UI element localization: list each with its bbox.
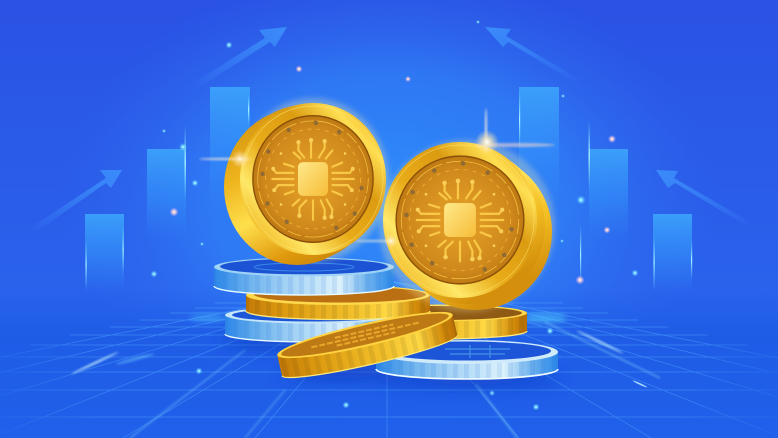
arrow: upper right [485, 27, 578, 84]
coin face: circuit chip [396, 156, 524, 284]
tilted gold coin: front [275, 304, 459, 384]
blue coin: front right [376, 340, 558, 379]
arrow: lower left [30, 170, 122, 232]
flare on left coin [199, 150, 251, 168]
coin face: circuit chip [253, 116, 373, 242]
large gold chip coin: left [224, 98, 389, 265]
large gold chip coin: right [379, 140, 555, 312]
blue coin: lower left of stack [225, 306, 399, 342]
left rising bar chart [85, 87, 250, 294]
right mirrored bar chart [519, 87, 692, 294]
arrow: upper left [192, 27, 287, 88]
perspective floor grid [0, 280, 778, 438]
gold coin: right under large coin [347, 304, 527, 339]
arrow: lower right [656, 170, 750, 228]
coin shadows on floor [220, 336, 560, 386]
gold coin: middle of stack [246, 285, 430, 320]
blue coin: top of stack [214, 258, 394, 295]
glowing sparkle dots [150, 20, 638, 410]
flare on right coin [355, 108, 555, 248]
